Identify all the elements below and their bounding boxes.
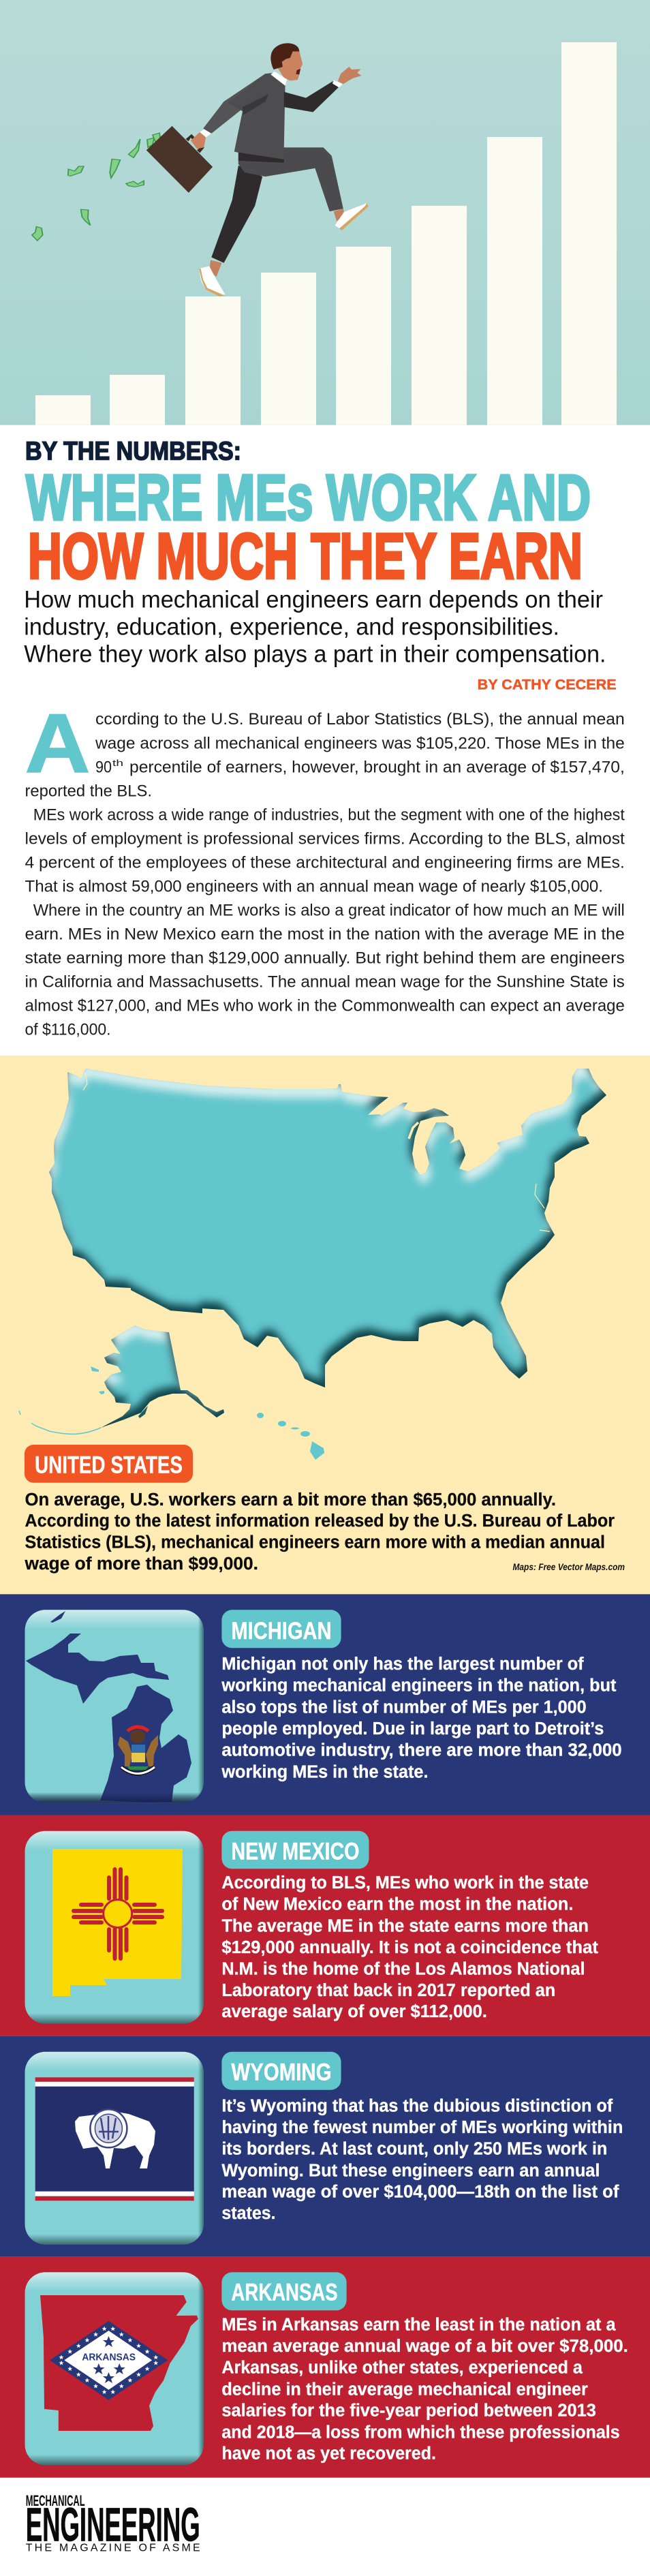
- rear arm and jacket: [203, 74, 265, 134]
- article body: [25, 710, 625, 1039]
- article body: levels of employment is professional services firms. According to the BLS, almost: [25, 829, 625, 848]
- panel: United States: [0, 1056, 650, 1594]
- article body: in California and Massachusetts. The annual mean wage for the Sunshine State is: [25, 972, 625, 991]
- text: Wyoming: states.: [221, 2204, 276, 2223]
- card: Wyoming flag: [25, 2052, 204, 2245]
- icon: Arkansas diamond: [50, 2321, 168, 2400]
- panel: Arkansas: [0, 2257, 650, 2478]
- text: Michigan: also tops the list of number of MEs per 1,000: [221, 1698, 587, 1717]
- heading: by the numbers: BY THE NUMBERS:: [25, 438, 241, 466]
- text: Wyoming: Wyoming. But these engineers earn an annual: [221, 2161, 600, 2180]
- text: Michigan: people employed. Due in large part to Detroit’s: [221, 1719, 604, 1738]
- text: New Mexico: average salary of over $112,000.: [221, 2002, 487, 2021]
- text: Michigan: working mechanical engineers in the nation, but: [221, 1676, 617, 1696]
- hand on case: [191, 132, 206, 149]
- icon: Arkansas diamond: ARKANSAS: [82, 2351, 136, 2363]
- icon: Michigan coat of arms: [118, 1727, 158, 1773]
- card: Michigan map and seal: [25, 1610, 204, 1803]
- card: Arkansas state and flag diamond: [25, 2272, 204, 2465]
- Alaska: [101, 1325, 224, 1428]
- text: New Mexico: $129,000 annually. It is not a coincidence that: [221, 1938, 598, 1957]
- text: New Mexico: of New Mexico earn the most in the nation.: [221, 1895, 573, 1914]
- label: United States: UNITED STATES: [35, 1452, 183, 1479]
- drop cap: A: [25, 697, 90, 791]
- panel: Wyoming: [0, 2036, 650, 2257]
- label: Wyoming: WYOMING: [231, 2059, 332, 2085]
- map: United States: [19, 1069, 606, 1460]
- text: Arkansas: decline in their average mechanical engineer: [221, 2380, 588, 2399]
- text: Wyoming: [221, 2096, 623, 2223]
- front foot: [334, 209, 345, 221]
- text: Arkansas: salaries for the five-year period between 2013: [221, 2402, 596, 2421]
- briefcase: [186, 134, 204, 153]
- card: New Mexico state and Zia symbol: [25, 1831, 204, 2024]
- contiguous states: [49, 1069, 606, 1387]
- article body: 4 percent of the employees of these architectural and engineering firms are MEs.: [25, 853, 625, 872]
- article body: state earning more than $129,000 annually. But right behind them are engineers: [25, 949, 625, 967]
- subheading: Where they work also plays a part in their compensation.: [24, 641, 606, 668]
- text: United States: [24, 1490, 615, 1574]
- text: Wyoming: having the fewest number of MEs working within: [221, 2118, 623, 2137]
- running businessman with briefcase: [32, 43, 369, 296]
- text: Michigan: working MEs in the state.: [221, 1762, 428, 1781]
- text: New Mexico: [221, 1873, 598, 2021]
- label: New Mexico: [221, 1831, 369, 1869]
- article body: earn. MEs in New Mexico earn the most in the nation with the average ME in the: [25, 925, 625, 943]
- text: Wyoming: its borders. At last count, only 250 MEs work in: [221, 2140, 607, 2159]
- text: United States: Statistics (BLS), mechanical engineers earn more with a median annual: [25, 1533, 605, 1552]
- label: Arkansas: [221, 2272, 347, 2310]
- text: Arkansas: and 2018—a loss from which these professionals: [221, 2423, 620, 2442]
- label: Arkansas: ARKANSAS: [231, 2280, 338, 2306]
- text: New Mexico: The average ME in the state earns more than: [221, 1916, 589, 1935]
- icon: bison and seal: [75, 2109, 155, 2168]
- front leg: [238, 147, 343, 211]
- article body: wage across all mechanical engineers was $105,220. Those MEs in the: [95, 734, 625, 752]
- text: New Mexico: Laboratory that back in 2017 reported an: [221, 1981, 555, 2000]
- article body: Where in the country an ME works is also a great indicator of how much an ME will: [33, 901, 625, 919]
- article body: th: [112, 758, 123, 768]
- back leg: [211, 166, 262, 263]
- head: [277, 50, 303, 80]
- logo: Mechanical Engineering: THE MAGAZINE OF ASME: [26, 2542, 200, 2554]
- text: Michigan: [221, 1655, 622, 1781]
- text: Arkansas: [221, 2315, 628, 2463]
- text: Arkansas: MEs in Arkansas earn the least in the nation at a: [221, 2315, 616, 2334]
- article body: MEs work across a wide range of industries, but the segment with one of the highest: [33, 806, 625, 824]
- logo: Mechanical Engineering: MECHANICAL: [26, 2492, 85, 2509]
- article body: of $116,000.: [25, 1020, 110, 1039]
- label: United States: [25, 1445, 193, 1483]
- subheading: How much mechanical engineers earn depends on their: [24, 587, 603, 613]
- article body: 90: [95, 758, 112, 777]
- article body: almost $127,000, and MEs who work in the Commonwealth can expect an average: [25, 996, 625, 1015]
- map credit: Maps: Free Vector Maps.com: [512, 1561, 625, 1572]
- subheading: [24, 587, 606, 668]
- coastline inlets: [83, 1072, 575, 1231]
- label: Michigan: [221, 1610, 341, 1648]
- text: Wyoming: It’s Wyoming that has the dubious distinction of: [221, 2096, 613, 2115]
- subheading: industry, education, experience, and responsibilities.: [24, 614, 559, 641]
- article body: percentile of earners, however, brought in an average of $157,470,: [129, 758, 625, 777]
- Hawaii: [257, 1413, 324, 1460]
- logo: Mechanical Engineering: ENGINEERING: [26, 2498, 200, 2551]
- text: United States: wage of more than $99,000.: [24, 1554, 258, 1574]
- title: [26, 462, 591, 593]
- panel: New Mexico: [0, 1815, 650, 2036]
- label: New Mexico: NEW MEXICO: [231, 1838, 360, 1865]
- panel: Michigan: [0, 1594, 650, 1815]
- text: United States: On average, U.S. workers earn a bit more than $65,000 annually.: [25, 1490, 556, 1509]
- text: Arkansas: Arkansas, unlike other states, experienced a: [221, 2359, 583, 2378]
- text: New Mexico: According to BLS, MEs who work in the state: [221, 1873, 589, 1892]
- label: Michigan: MICHIGAN: [231, 1618, 332, 1644]
- text: New Mexico: N.M. is the home of the Los Alamos National: [221, 1959, 585, 1978]
- text: United States: According to the latest information released by the U.S. Bureau of Labor: [25, 1512, 615, 1531]
- byline: BY CATHY CECERE: [478, 677, 617, 693]
- text: Arkansas: have not as yet recovered.: [221, 2444, 436, 2463]
- icon: Zia sun: [72, 1867, 164, 1961]
- logo: Mechanical Engineering: [26, 2492, 200, 2554]
- text: Michigan: automotive industry, there are more than 32,000: [221, 1741, 622, 1760]
- article body: ccording to the U.S. Bureau of Labor Statistics (BLS), the annual mean: [95, 710, 625, 729]
- flying money: [32, 133, 160, 241]
- rising bar steps: [35, 42, 617, 425]
- back foot: [209, 260, 222, 277]
- text: Wyoming: mean wage of over $104,000—18th on the list of: [221, 2182, 619, 2201]
- label: Wyoming: [221, 2052, 341, 2090]
- article body: reported the BLS.: [25, 782, 152, 800]
- article body: That is almost 59,000 engineers with an annual mean wage of nearly $105,000.: [25, 877, 603, 895]
- front arm: [284, 80, 339, 112]
- text: Michigan: Michigan not only has the largest number of: [221, 1655, 584, 1674]
- Alaska islands: [19, 1366, 148, 1434]
- hero illustration: [0, 0, 650, 425]
- text: Arkansas: mean average annual wage of a bit over $78,000.: [221, 2337, 628, 2356]
